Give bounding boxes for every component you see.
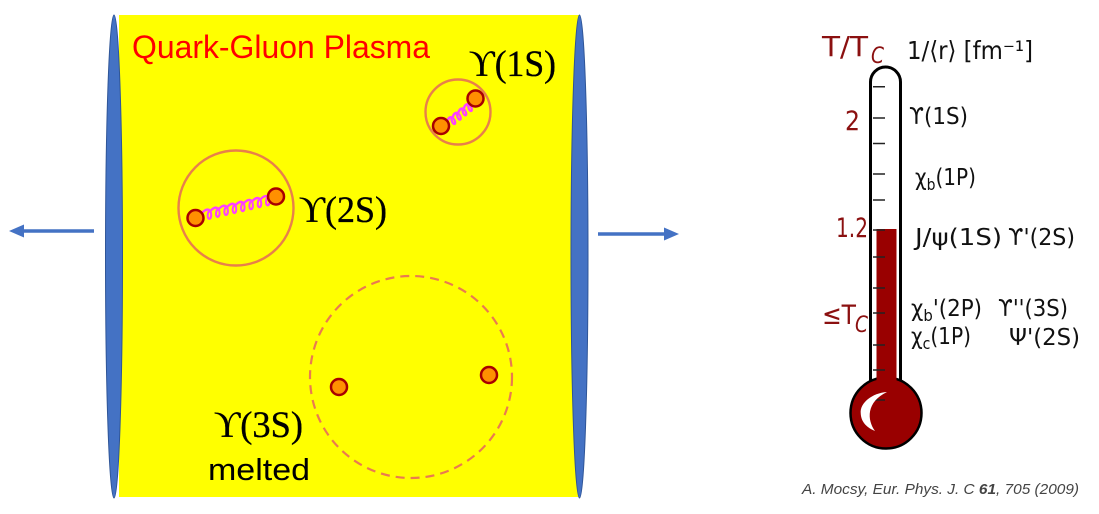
mercury neck bbox=[876, 370, 896, 390]
quark bbox=[433, 118, 449, 134]
citation: A. Mocsy, Eur. Phys. J. C 61, 705 (2009) bbox=[801, 481, 1079, 498]
chi b 1P state label: b bbox=[927, 175, 935, 194]
arrow: right expansion bbox=[598, 228, 679, 240]
antiquark bbox=[468, 90, 484, 106]
subscript c: C bbox=[871, 44, 885, 69]
upsilon 2S state bbox=[178, 150, 294, 266]
scale value 1.2: 1.2 bbox=[836, 213, 868, 244]
left end cap bbox=[106, 15, 122, 498]
thermometer tube bbox=[870, 67, 900, 385]
upsilon prime 2S state label: ϒ'(2S) bbox=[1008, 225, 1075, 251]
subscript c lower: C bbox=[855, 313, 869, 338]
heading: Quark-Gluon Plasma: Quark-Gluon Plasma bbox=[132, 29, 430, 65]
plasma body bbox=[119, 15, 579, 497]
axis label: T/Tc: T/T bbox=[821, 30, 869, 63]
J/psi state label: J/ψ(1S) bbox=[913, 225, 1002, 251]
psi prime 2S state label: Ψ'(2S) bbox=[1009, 325, 1080, 351]
antiquark bbox=[268, 188, 284, 204]
chi c 1P state label: χ bbox=[911, 324, 924, 350]
chi b 1P state label: (1P) bbox=[935, 165, 976, 191]
label: melted: melted bbox=[208, 452, 310, 487]
dashed dissolved circle 3S bbox=[310, 276, 512, 478]
upsilon double prime 3S state label: ϒ''(3S) bbox=[998, 296, 1068, 322]
chi b prime 2P state label: χ bbox=[911, 296, 924, 322]
quark bbox=[188, 210, 204, 226]
label: upsilon 3S: ϒ(3S) bbox=[214, 405, 303, 446]
free quark bbox=[331, 379, 347, 395]
chi c 1P state label: c bbox=[923, 334, 930, 353]
upsilon 3S melted state bbox=[310, 276, 512, 478]
gluon spring 1S bbox=[446, 103, 473, 127]
label: upsilon 1S: ϒ(1S) bbox=[469, 44, 556, 85]
thermometer bulb bbox=[850, 378, 922, 448]
scale ticks bbox=[873, 87, 885, 400]
chi b 1P state label: χ bbox=[915, 165, 928, 191]
binding circle 1S bbox=[426, 80, 490, 144]
mercury column bbox=[876, 229, 896, 389]
upsilon 1S state label: ϒ(1S) bbox=[909, 104, 968, 130]
gluon spring 2S bbox=[202, 195, 271, 220]
binding circle 2S bbox=[178, 150, 294, 266]
chi b prime 2P state label: '(2P) bbox=[933, 296, 982, 322]
label: upsilon 2S: ϒ(2S) bbox=[299, 190, 387, 231]
scale value at or below Tc: ≤T bbox=[822, 300, 856, 331]
upsilon 1S state bbox=[426, 80, 490, 144]
thermometer bbox=[850, 67, 922, 449]
panel: quark-gluon plasma cylinder bbox=[106, 15, 588, 498]
scale value 2: 2 bbox=[845, 106, 860, 137]
bulb highlight bbox=[861, 392, 887, 431]
chi b prime 2P state label: b bbox=[923, 306, 933, 325]
right end cap bbox=[571, 15, 588, 498]
arrow: left expansion bbox=[9, 224, 94, 238]
axis label: inverse radius: 1/⟨r⟩ [fm⁻¹] bbox=[907, 36, 1033, 65]
state labels bbox=[909, 104, 1080, 353]
chi c 1P state label: (1P) bbox=[930, 324, 971, 350]
free antiquark bbox=[481, 367, 497, 383]
